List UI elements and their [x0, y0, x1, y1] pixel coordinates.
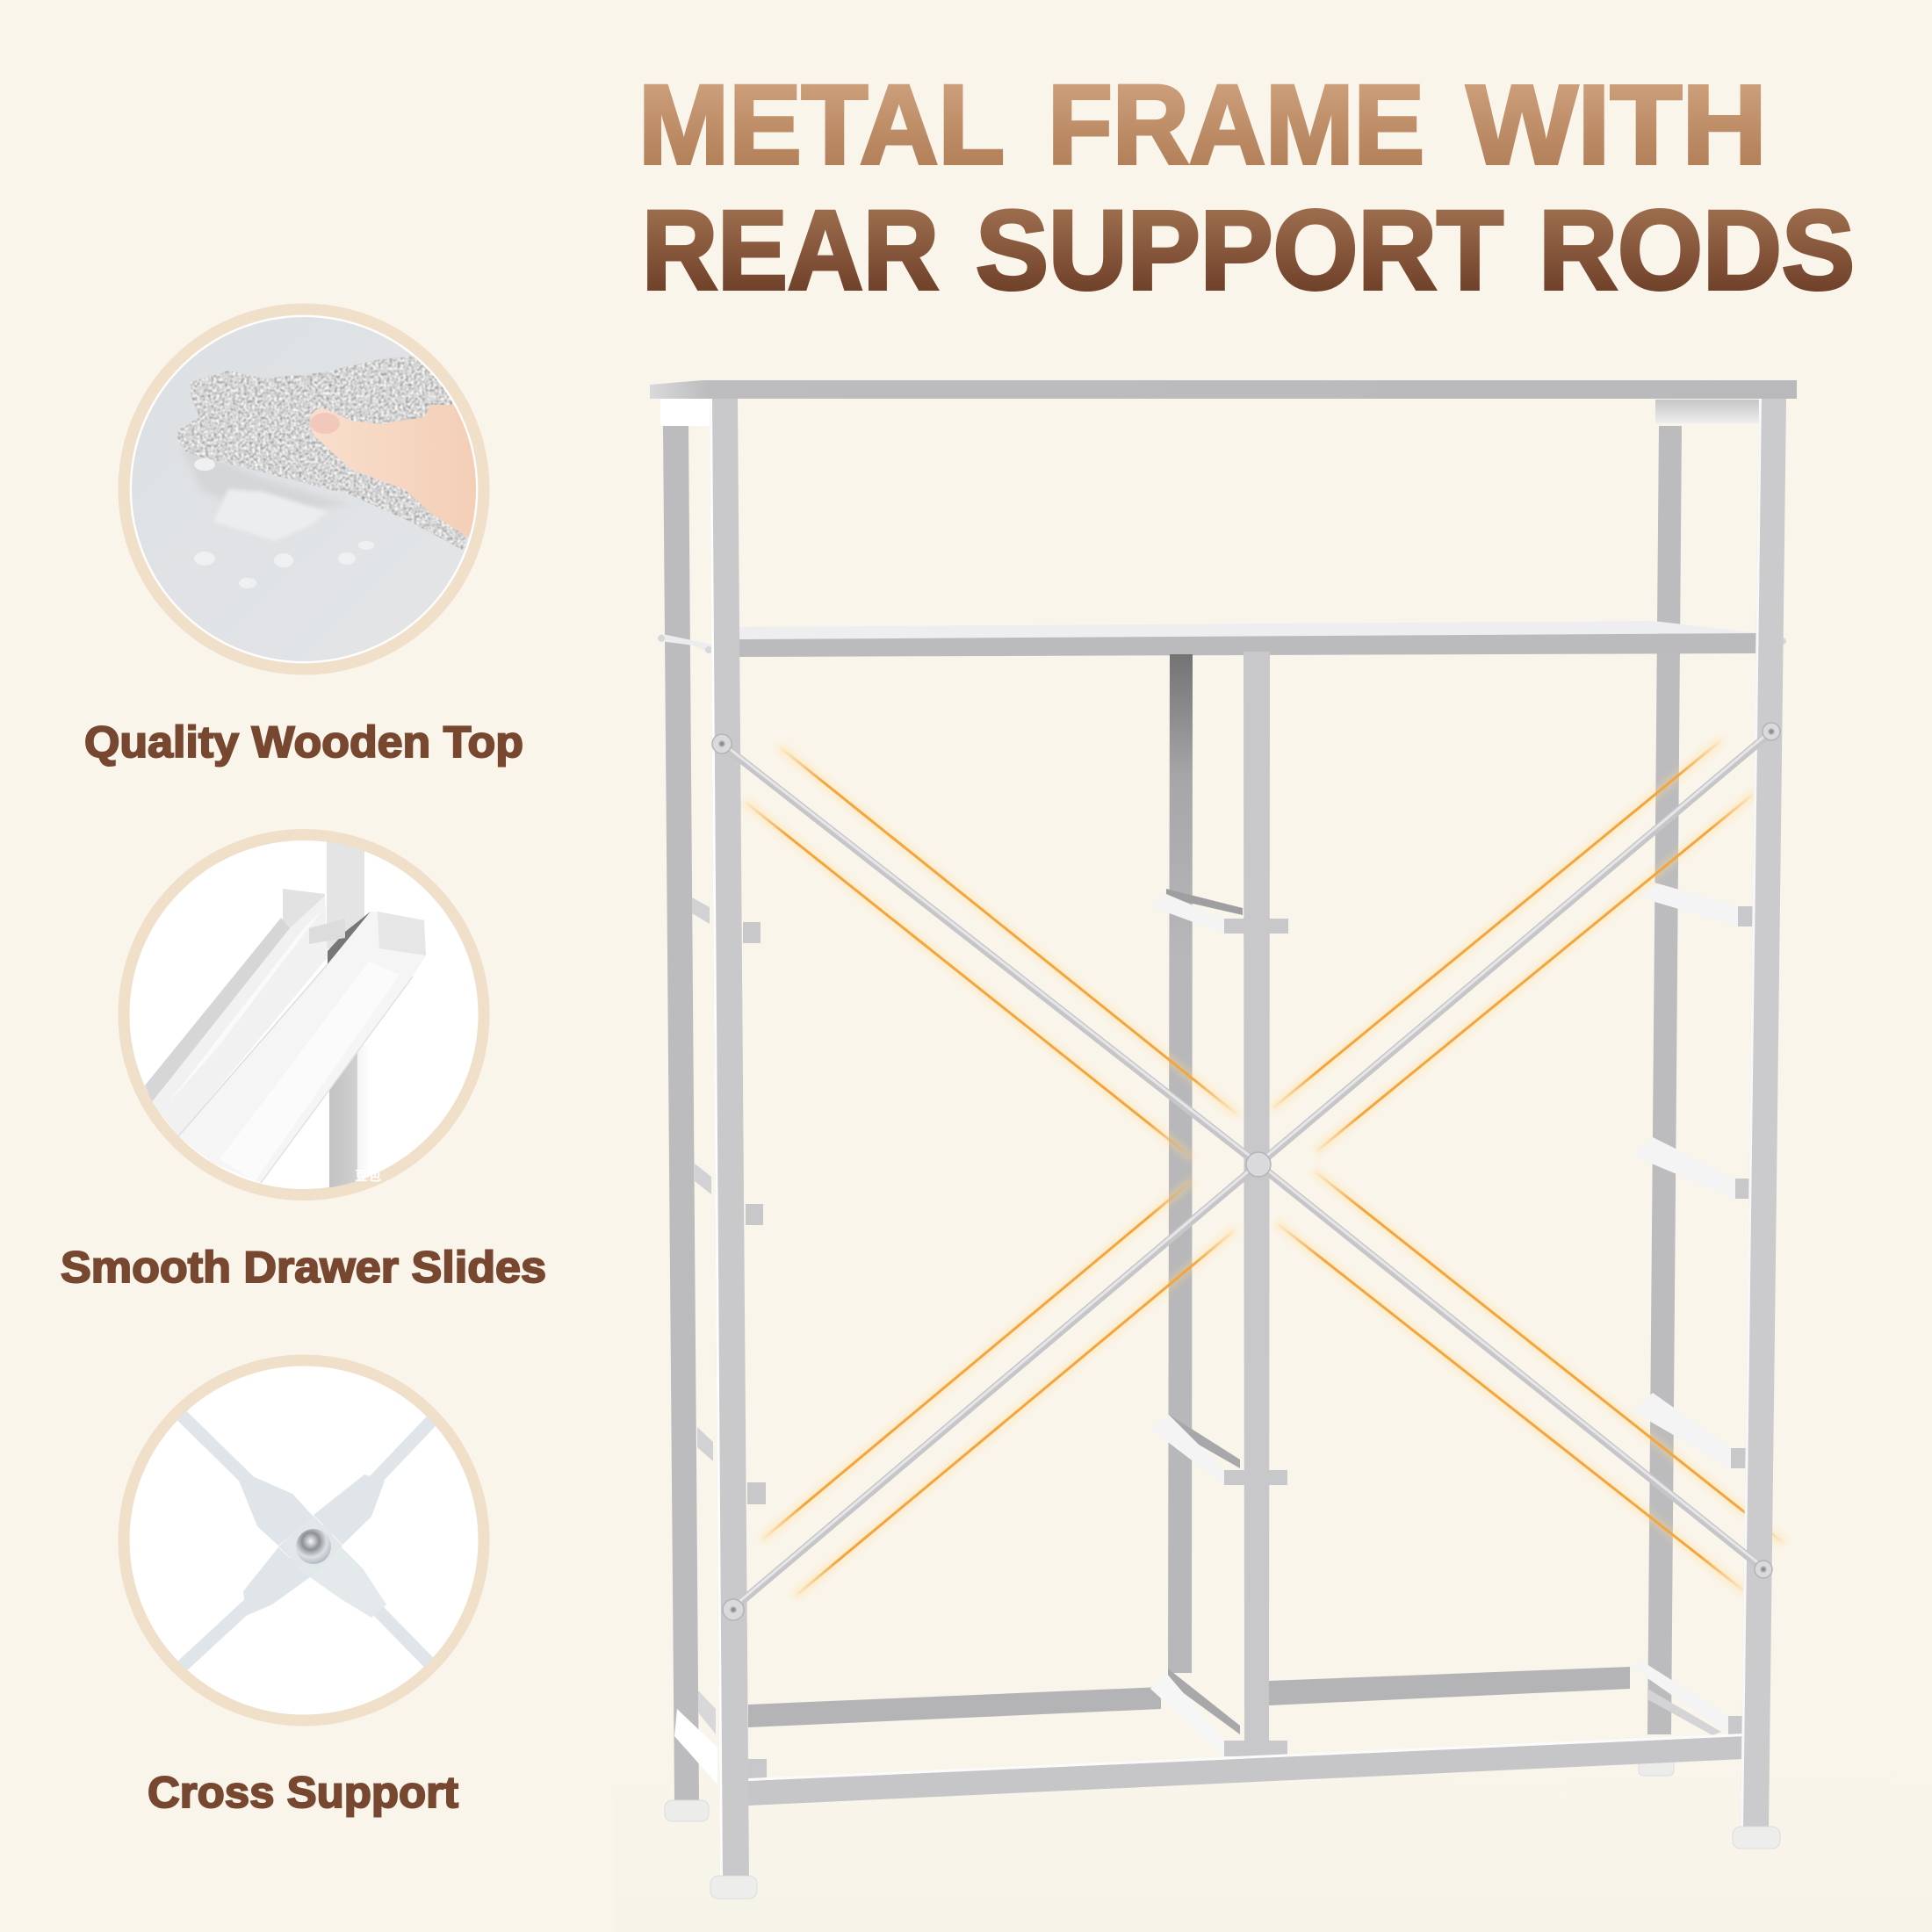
watermark: 豆包 — [355, 1168, 381, 1184]
title: WITH — [1467, 62, 1767, 188]
title: METAL — [638, 62, 1005, 188]
panel: cross support detail — [124, 1360, 484, 1720]
photo: crossed rods with rivet — [176, 1409, 436, 1672]
centre back post — [1168, 654, 1193, 1673]
drawer slides: left side — [674, 898, 767, 1784]
chart: metal frame product illustration — [650, 380, 1797, 1899]
back bottom rails — [748, 1667, 1630, 1727]
top board — [650, 380, 1797, 399]
label: smooth drawer slides: Smooth Drawer Slides — [61, 1243, 546, 1292]
centre front post — [1244, 652, 1270, 1759]
title — [638, 62, 1855, 314]
back feet — [665, 1755, 1674, 1821]
title: FRAME — [1048, 62, 1424, 188]
drawer slides: right side — [1630, 883, 1753, 1735]
back legs — [663, 426, 1682, 1800]
title: SUPPORT — [976, 188, 1503, 314]
panel: smooth drawer slides detail — [124, 834, 484, 1194]
title: REAR — [642, 188, 939, 314]
title: RODS — [1539, 188, 1855, 314]
front feet — [710, 1827, 1780, 1899]
rod pivots — [712, 723, 1780, 1620]
label: quality wooden top: Quality Wooden Top — [84, 717, 523, 767]
drawer slides: centre — [1150, 889, 1288, 1756]
front legs — [710, 399, 1786, 1879]
middle shelf — [658, 621, 1786, 657]
upper leg brackets — [660, 399, 1759, 426]
cross support rods — [725, 733, 1768, 1606]
photo: cloth wiping the surface — [132, 317, 476, 661]
panel: quality wooden top detail — [123, 307, 492, 676]
label: cross support: Cross Support — [148, 1768, 458, 1817]
front bottom rail — [748, 1734, 1744, 1806]
photo: drawer slide rails — [145, 834, 426, 1194]
orange support highlight lines — [744, 739, 1784, 1597]
